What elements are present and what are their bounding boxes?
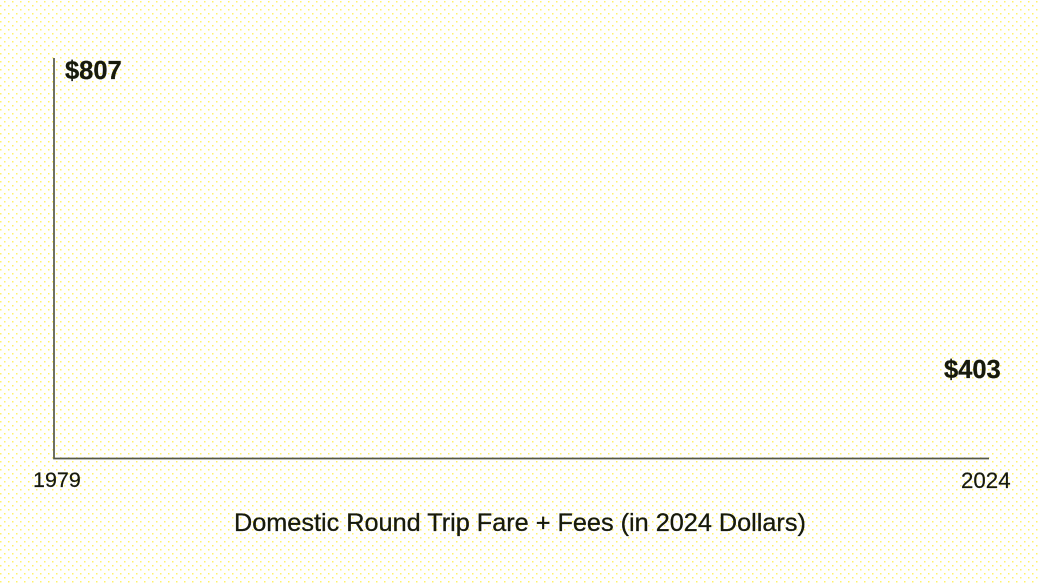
end value label: $403 (944, 356, 1001, 384)
x-axis end year: 2024 (961, 468, 1011, 493)
axis caption: Domestic Round Trip Fare + Fees (in 2024 Dollars) (234, 509, 806, 537)
start value label: $807 (65, 57, 122, 85)
x-axis start year: 1979 (33, 468, 81, 492)
